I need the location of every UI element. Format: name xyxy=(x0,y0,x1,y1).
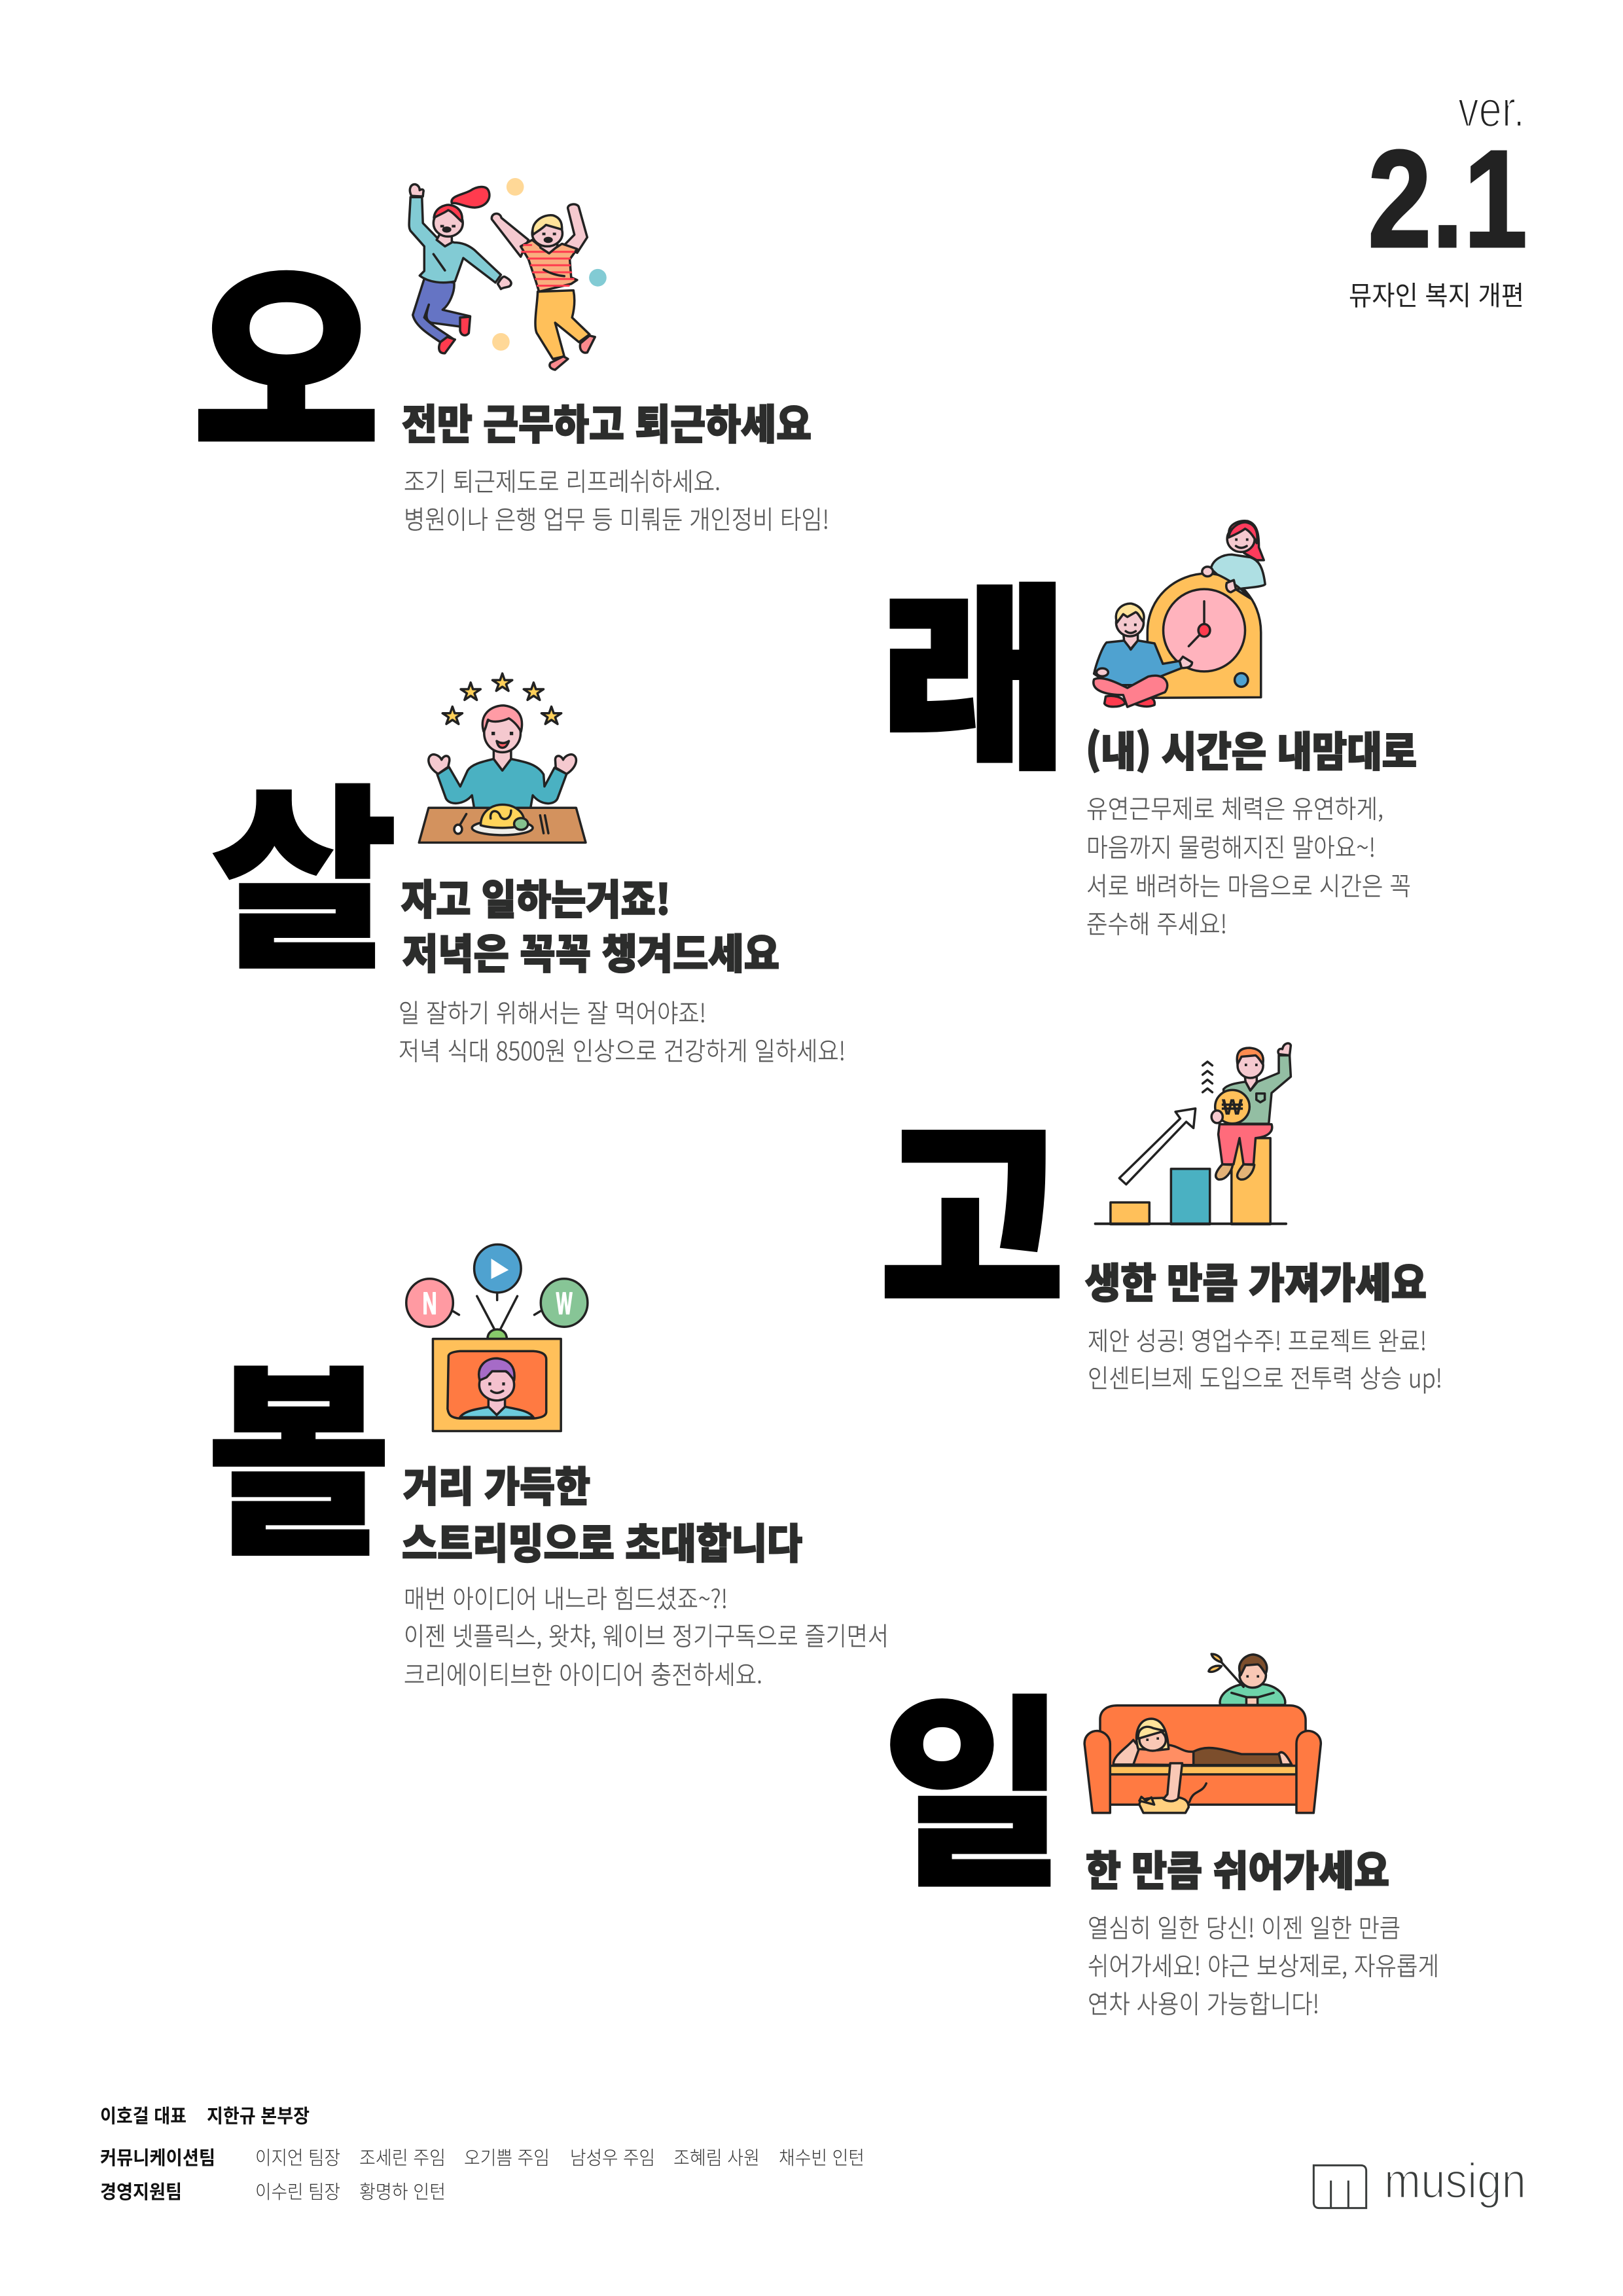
communication team: 커뮤니케이션팀 xyxy=(100,2143,215,2170)
body text: 매번 아이디어 내느라 힘드셨죠~?! xyxy=(404,1579,728,1616)
body text: 이젠 넷플릭스, 왓챠, 웨이브 정기구독으로 즐기면서 xyxy=(404,1617,889,1653)
body text: 크리에이티브한 아이디어 충전하세요. xyxy=(404,1655,762,1692)
title: 거리 가득한 xyxy=(403,1454,590,1514)
body text xyxy=(404,462,829,537)
management team: 이수린 팀장 xyxy=(255,2177,340,2204)
big letter 고: 고 xyxy=(880,1050,1064,1359)
title: 생한 만큼 가져가세요 xyxy=(1085,1251,1427,1310)
body text: 서로 배려하는 마음으로 시간은 꼭 xyxy=(1086,867,1411,903)
title: 한 만큼 쉬어가세요 xyxy=(1086,1839,1389,1898)
body text xyxy=(1088,1909,1439,2021)
title xyxy=(401,867,779,981)
illustration: clock and two people xyxy=(1094,521,1265,707)
leadership names: 지한규 본부장 xyxy=(207,2101,310,2128)
communication team xyxy=(100,2143,865,2170)
big letter 오: 오 xyxy=(194,200,379,501)
musign logo xyxy=(1313,2153,1526,2209)
leadership names: 이호걸 대표 xyxy=(100,2101,187,2128)
management team: 황명하 인턴 xyxy=(359,2177,446,2204)
footer credits xyxy=(100,2101,865,2204)
body text: 연차 사용이 가능합니다! xyxy=(1088,1984,1319,2021)
body text xyxy=(404,1579,889,1692)
title: 스트리밍으로 초대합니다 xyxy=(402,1511,802,1571)
body text xyxy=(1086,789,1411,941)
communication team: 조혜림 사원 xyxy=(673,2143,760,2170)
big letter 래: 래 xyxy=(881,522,1068,806)
illustration: man with omelette xyxy=(419,673,586,842)
logo wordmark: musign xyxy=(1384,2153,1526,2209)
version block xyxy=(1349,80,1527,313)
title: (내) 시간은 내맘대로 xyxy=(1086,719,1417,779)
version subtitle: 뮤자인 복지 개편 xyxy=(1349,274,1524,313)
illustration: growth chart with man xyxy=(1096,1043,1291,1224)
panel: 래 xyxy=(881,521,1417,941)
panel: 일 xyxy=(882,1630,1439,2021)
version number: 2.1 xyxy=(1368,121,1527,276)
logo mark xyxy=(1313,2165,1366,2208)
ver label: ver. xyxy=(1458,80,1525,137)
illustration: growth chart with man: ₩ xyxy=(1222,1095,1243,1120)
body text: 열심히 일한 당신! 이젠 일한 만큼 xyxy=(1088,1909,1400,1945)
communication team: 오기쁨 주임 xyxy=(464,2143,550,2170)
title xyxy=(402,1454,802,1571)
body text: 저녁 식대 8500원 인상으로 건강하게 일하세요! xyxy=(399,1031,846,1068)
body text xyxy=(399,994,846,1068)
panel: 살 xyxy=(210,673,846,1068)
illustration: two people jumping xyxy=(409,178,607,370)
body text: 준수해 주세요! xyxy=(1086,905,1227,941)
communication team: 조세린 주임 xyxy=(359,2143,446,2170)
communication team: 남성우 주임 xyxy=(570,2143,655,2170)
title: 자고 일하는거죠! xyxy=(401,867,671,927)
body text: 일 잘하기 위해서는 잘 먹어야죠! xyxy=(399,994,706,1030)
body text: 병원이나 은행 업무 등 미뤄둔 개인정비 타임! xyxy=(404,500,829,537)
panel: 오 xyxy=(194,178,829,537)
management team: 경영지원팀 xyxy=(100,2177,182,2204)
body text: 조기 퇴근제도로 리프레쉬하세요. xyxy=(404,462,721,499)
body text: 마음까지 물렁해지진 말아요~! xyxy=(1086,828,1376,865)
body text: 유연근무제로 체력은 유연하게, xyxy=(1086,789,1383,826)
management team xyxy=(100,2177,446,2204)
body text: 제안 성공! 영업수주! 프로젝트 완료! xyxy=(1088,1321,1427,1358)
body text: 인센티브제 도입으로 전투력 상승 up! xyxy=(1088,1359,1442,1395)
illustration: TV with streaming balloons: W xyxy=(556,1286,572,1321)
body text: 쉬어가세요! 야근 보상제로, 자유롭게 xyxy=(1088,1946,1439,1983)
illustration: TV with streaming balloons xyxy=(406,1244,588,1431)
illustration: sofa rest xyxy=(1084,1654,1321,1813)
body text xyxy=(1088,1321,1442,1395)
big letter 살: 살 xyxy=(210,723,398,1007)
panel: 고 xyxy=(880,1043,1442,1395)
communication team: 채수빈 인턴 xyxy=(779,2143,865,2170)
big letter 일: 일 xyxy=(882,1630,1065,1928)
big letter 볼: 볼 xyxy=(207,1300,391,1595)
leadership names xyxy=(100,2101,310,2128)
communication team: 이지언 팀장 xyxy=(255,2143,340,2170)
title: 전만 근무하고 퇴근하세요 xyxy=(402,392,812,452)
illustration: TV with streaming balloons: N xyxy=(423,1287,437,1321)
panel: 볼 xyxy=(207,1244,889,1692)
title: 저녁은 꼭꼭 챙겨드세요 xyxy=(402,922,779,981)
